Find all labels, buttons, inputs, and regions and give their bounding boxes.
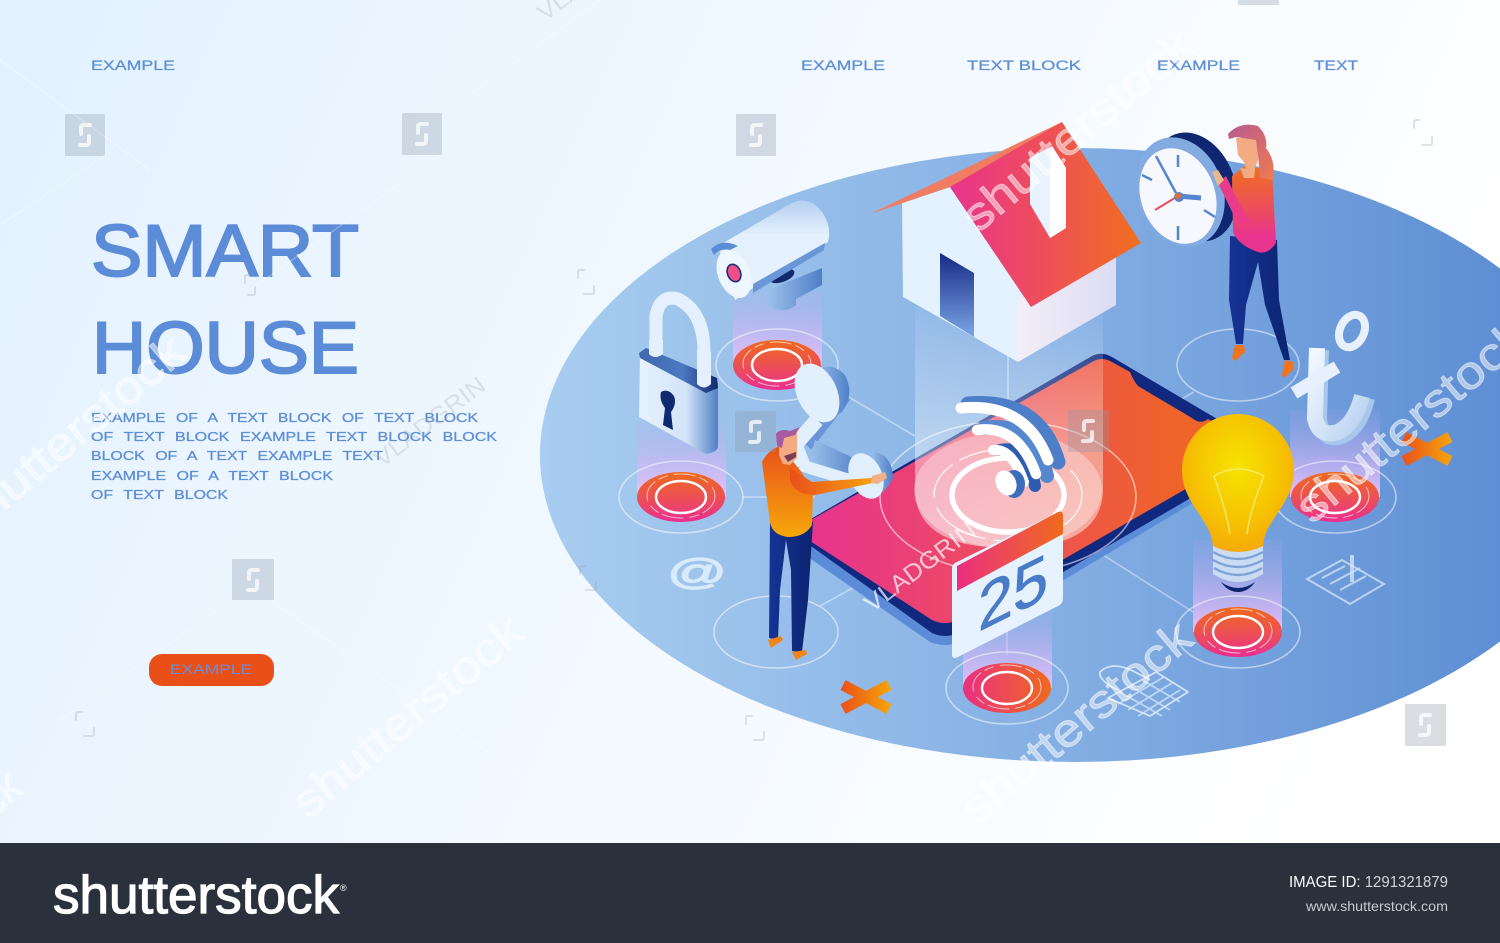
calendar card: [952, 512, 1063, 658]
pedestal: bulb: [1176, 540, 1300, 668]
icon: at sign: @: [667, 552, 727, 592]
smartphone: [790, 354, 1258, 645]
call to action button: EXAMPLE: [170, 661, 252, 677]
body text block: OF TEXT BLOCK EXAMPLE TEXT BLOCK BLOCK: [91, 429, 497, 444]
cross mark: lower: [843, 685, 889, 709]
padlock: [639, 298, 718, 454]
body text block: EXAMPLE OF A TEXT BLOCK OF TEXT BLOCK: [91, 410, 478, 425]
wall clock: [1120, 120, 1252, 259]
call to action button: [149, 654, 274, 686]
top navigation: TEXT BLOCK: [967, 58, 1081, 73]
robot arm: [786, 356, 893, 505]
stock watermark overlay: shutterstock: [951, 18, 1204, 242]
top navigation: EXAMPLE: [91, 58, 175, 73]
title: HOUSE: [92, 308, 359, 389]
pedestal: lock: [619, 420, 743, 533]
house: [870, 122, 1141, 362]
footer logo: ®: [340, 883, 347, 893]
body text block: [91, 410, 497, 502]
top navigation: TEXT: [1314, 58, 1358, 73]
ring: woman position: [1177, 329, 1299, 401]
icon: notebook: [1307, 555, 1384, 604]
site url: www.shutterstock.com: [1305, 898, 1448, 914]
body text block: EXAMPLE OF A TEXT BLOCK: [91, 468, 333, 483]
top navigation: [91, 58, 1358, 73]
body text block: OF TEXT BLOCK: [91, 487, 228, 502]
light bulb: [1182, 414, 1294, 592]
woman figure: [1212, 125, 1293, 378]
pedestal: temperature: [1274, 410, 1396, 533]
cross mark: right: [1404, 437, 1450, 461]
title: [91, 211, 359, 389]
ring: man position: [714, 596, 838, 668]
top navigation: EXAMPLE: [801, 58, 885, 73]
projection beam under house: [915, 300, 1103, 548]
stock watermark overlay: VLADGRIN: [859, 517, 981, 618]
man figure: [762, 427, 887, 660]
footer bar: [0, 843, 1500, 943]
footer logo: shutterstock: [53, 866, 339, 925]
illustration: smart home isometric scene: [540, 120, 1500, 762]
body text block: BLOCK OF A TEXT EXAMPLE TEXT: [91, 448, 383, 463]
image id: IMAGE ID: 1291321879: [1289, 874, 1448, 891]
title: SMART: [91, 211, 359, 292]
security camera: [710, 200, 829, 310]
stock watermark overlay: shutterstock: [950, 610, 1203, 834]
calendar card: 25: [978, 540, 1048, 646]
top navigation: EXAMPLE: [1157, 58, 1240, 73]
wifi symbol: [961, 403, 1058, 499]
pedestal: camera: [716, 290, 838, 401]
icon: shopping basket: [1100, 666, 1188, 716]
stock watermark overlay: shutterstock: [281, 604, 534, 828]
stock watermark overlay: VLADGRIN: [369, 372, 491, 473]
temperature symbol: [1294, 311, 1370, 437]
platform disc: [540, 148, 1500, 762]
pedestal: calendar: [946, 610, 1068, 724]
